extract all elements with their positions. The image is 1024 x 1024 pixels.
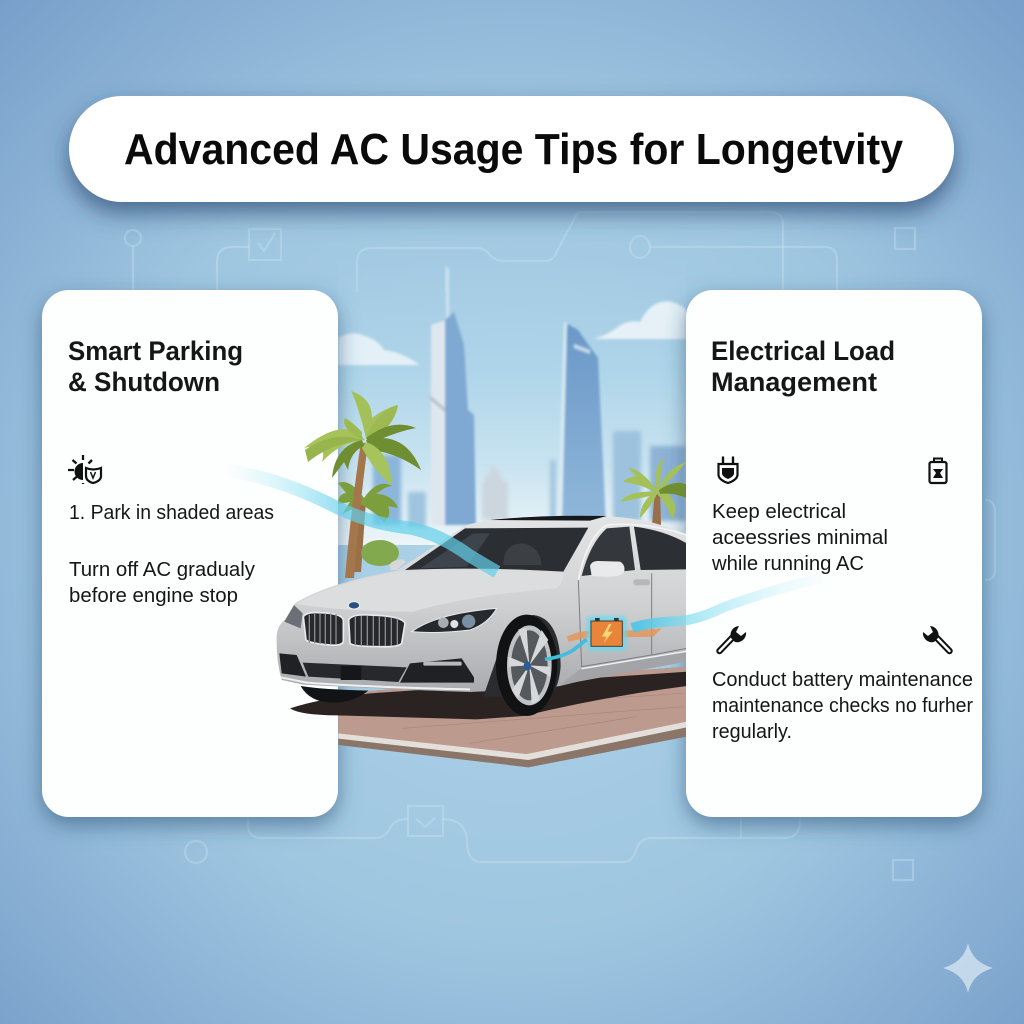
front left tire (301, 686, 368, 703)
right panel text: regularly. (712, 721, 792, 743)
icon: plug shield (718, 456, 738, 483)
right panel text: aceessries minimal (712, 527, 888, 549)
car body (277, 516, 687, 692)
palm trees (304, 391, 690, 578)
heading: smart parking: Smart Parking (68, 336, 243, 366)
distant buildings (373, 431, 686, 527)
heading: management: Management (711, 367, 877, 397)
airflow near wheel (545, 639, 587, 659)
right panel text: maintenance checks no furher (712, 695, 973, 717)
door handle (633, 579, 650, 585)
left panel text (68, 336, 274, 607)
tower: right (558, 322, 606, 525)
right panel text: while running AC (711, 553, 864, 575)
tip: park in shade: 1. Park in shaded areas (69, 502, 274, 524)
roof strip (490, 516, 607, 521)
icon: wrench right (923, 626, 950, 651)
cloud: left (338, 333, 420, 365)
tip: before engine stop: before engine stop (69, 585, 238, 607)
tip: battery maintenance: Conduct battery maintenance (712, 669, 973, 691)
city skyline (338, 255, 686, 545)
palm: right (620, 458, 690, 525)
icon: wrench left (720, 626, 746, 651)
tip: keep accessories minimal: Keep electrical (712, 501, 846, 523)
icon: battery (930, 458, 946, 483)
cloud: right (594, 301, 686, 339)
icon: sun and shield (68, 455, 101, 484)
panel: smart parking and shutdown (42, 290, 338, 817)
title: Advanced AC Usage Tips for Longetvity (124, 125, 903, 174)
door lines (578, 573, 687, 667)
lower intake (279, 653, 306, 677)
circuit line pattern (125, 212, 995, 880)
title banner (69, 96, 954, 202)
airflow wisp: right (632, 578, 822, 628)
pavement (338, 667, 687, 767)
panel: electrical load management (686, 290, 982, 817)
hood highlight (297, 582, 560, 612)
palm: rear small (338, 482, 399, 572)
tower: left (430, 268, 476, 525)
orange energy (567, 628, 662, 642)
airflow wisp: left (225, 470, 497, 572)
icon: sparkle star (943, 943, 993, 993)
right panel text (711, 336, 973, 743)
palm: front left (345, 442, 368, 578)
windshield (405, 528, 588, 572)
car shadow (290, 672, 687, 719)
front wheel (483, 615, 561, 716)
heading: electrical load: Electrical Load (711, 336, 895, 366)
side windows (582, 527, 635, 576)
heading: shutdown: & Shutdown (68, 367, 220, 397)
headlights (412, 608, 497, 633)
badge (348, 602, 360, 609)
grille (303, 612, 405, 647)
mirrors (590, 561, 624, 577)
battery icon (587, 616, 627, 651)
car and pavement illustration (277, 516, 687, 767)
tip: turn off gradually: Turn off AC gradualy (69, 559, 255, 581)
